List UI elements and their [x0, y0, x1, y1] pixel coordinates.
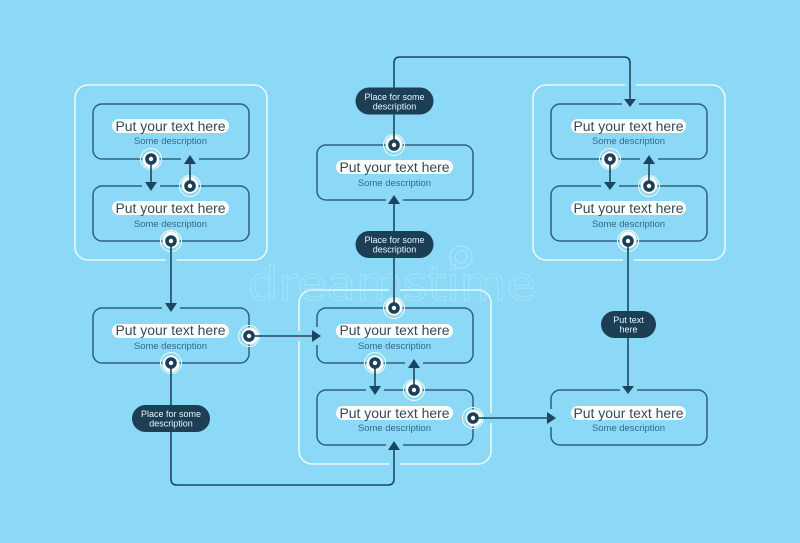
box: left third [93, 308, 249, 363]
arrows between center boxes [369, 359, 420, 395]
arrows between left boxes [145, 155, 196, 191]
label pill and text: Put your text here [574, 119, 684, 134]
label pill and text: Put your text here [340, 406, 450, 421]
description: Some description [592, 219, 665, 229]
callout: top [356, 88, 434, 114]
node: center middle top [384, 296, 404, 318]
callout: middle [356, 231, 434, 258]
description: Some description [358, 423, 431, 433]
connector: top box up and over to right group [394, 57, 636, 145]
connector: left group to left box [165, 241, 177, 312]
box: center bottom [317, 390, 473, 445]
box: left second [93, 186, 249, 241]
panel: left group [75, 85, 267, 260]
connector: left box down and around to center bottom box [171, 363, 400, 485]
description: Some description [134, 219, 207, 229]
node: right second out [638, 174, 660, 196]
label pill and text: Put your text here [116, 201, 226, 216]
callout: right [601, 311, 656, 338]
callout: top: description [373, 102, 416, 112]
callout: top: Place for some [364, 92, 425, 102]
node: center bottom top [404, 378, 424, 400]
watermark: dreamstime [248, 257, 536, 311]
box: left top [93, 104, 249, 159]
node: right top out [600, 148, 620, 171]
node: center bottom right [462, 408, 485, 428]
box: center middle [317, 308, 473, 363]
box: right bottom [551, 390, 707, 445]
node: left top out [140, 148, 162, 171]
connector: left box to center box [249, 330, 321, 342]
callout: left bottom: Place for some [141, 409, 201, 419]
callout: right: Put text [613, 315, 644, 325]
node: left second bottom [160, 230, 182, 253]
node: left third bottom [160, 352, 182, 375]
node: right second bottom [618, 230, 638, 253]
connector: center box up to top box [388, 195, 400, 308]
label pill and text: Put your text here [116, 119, 226, 134]
description: Some description [592, 423, 665, 433]
node: center top [384, 133, 404, 156]
description: Some description [358, 178, 431, 188]
label pill and text: Put your text here [574, 406, 684, 421]
arrows between right boxes [604, 155, 655, 190]
node: left third right [238, 326, 261, 346]
callout: middle: description [373, 244, 416, 254]
callout: right: here [619, 324, 638, 334]
node: center middle bottom [364, 352, 386, 375]
description: Some description [134, 341, 207, 351]
connector: center group to bottom right box [473, 412, 556, 424]
panel: right group [533, 85, 725, 260]
callout: left bottom [132, 405, 210, 432]
panel: center group [299, 290, 491, 464]
label pill and text: Put your text here [574, 201, 684, 216]
node: left second out [180, 174, 200, 196]
label pill and text: Put your text here [340, 160, 450, 175]
connector: right group to bottom right box [622, 241, 634, 394]
label pill and text: Put your text here [116, 323, 226, 338]
callout: left bottom: description [149, 418, 193, 428]
label pill and text: Put your text here [340, 323, 450, 338]
callout: middle: Place for some [364, 235, 425, 245]
description: Some description [592, 136, 665, 146]
box: right second [551, 186, 707, 241]
description: Some description [358, 341, 431, 351]
box: center top [317, 145, 473, 200]
box: right top [551, 104, 707, 159]
description: Some description [134, 136, 207, 146]
